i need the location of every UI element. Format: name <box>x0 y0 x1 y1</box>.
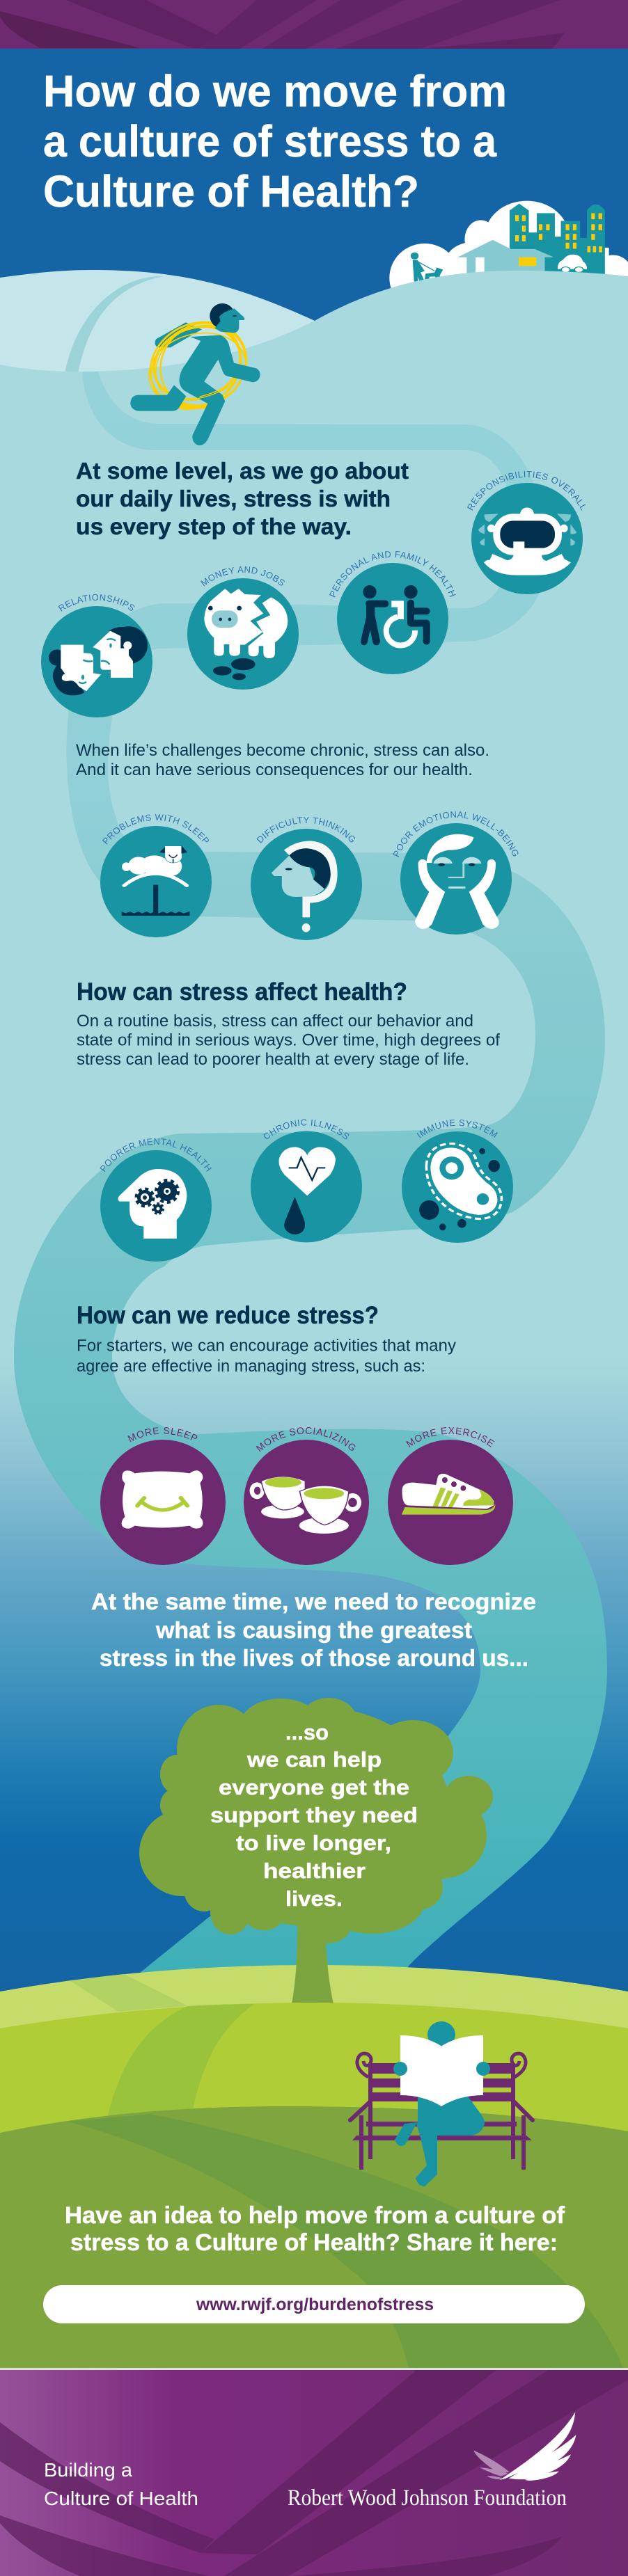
label: POOR EMOTIONAL WELL-BEING <box>393 811 518 857</box>
runner body <box>179 335 260 445</box>
open book <box>400 2035 483 2106</box>
broken piggy bank <box>204 589 288 680</box>
icon: car <box>558 255 587 272</box>
cell and particles <box>419 1143 501 1230</box>
hill: light green <box>0 1965 628 2039</box>
label: RELATIONSHIPS <box>58 594 135 612</box>
icon: money and jobs <box>187 566 299 690</box>
icon: wing logo <box>473 2412 576 2481</box>
body copy <box>77 1012 500 1069</box>
url pill <box>43 2285 585 2323</box>
text: in the tree: we can help <box>246 1747 382 1772</box>
label: DIFFICULTY THINKING <box>256 817 355 843</box>
footer tagline: Culture of Health <box>44 2488 198 2509</box>
text: in the tree <box>210 1720 418 1911</box>
bench with reading person <box>350 2021 533 2186</box>
hill: main <box>0 271 628 397</box>
person legs <box>395 2094 485 2186</box>
icon: more sleep <box>100 1427 226 1565</box>
label: RESPONSIBILITIES OVERALL <box>467 471 586 511</box>
tree <box>139 1698 493 2004</box>
overwhelmed figure <box>478 507 576 575</box>
url pill: www.rwjf.org/burdenofstress <box>196 2295 434 2314</box>
text: in the tree: support they need <box>210 1803 418 1827</box>
sheep jumping a fence <box>122 845 189 916</box>
footer <box>0 2368 628 2576</box>
worried face in hands <box>415 834 499 929</box>
text: when challenges become chronic <box>76 741 489 779</box>
bench <box>350 2053 533 2170</box>
hill: back left <box>0 270 315 390</box>
icon: person walking dog <box>411 253 443 284</box>
lower sky gradient <box>0 390 628 2004</box>
caregiver and wheelchair <box>361 585 427 646</box>
smiling pillow <box>122 1470 203 1529</box>
runner back foot <box>130 385 186 411</box>
title: a culture of stress to a <box>43 116 496 166</box>
text: stress is with us <box>76 458 409 539</box>
hill: dark green <box>0 2106 628 2368</box>
label: PROBLEMS WITH SLEEP <box>102 814 209 845</box>
icon: white cloud behind town <box>389 201 628 312</box>
icon: city buildings <box>510 204 605 278</box>
icon: runner tangled in yellow scribble <box>130 303 260 445</box>
text: stress is with us: At some level, as we go about <box>76 458 409 484</box>
hands <box>393 2062 490 2076</box>
label: CHRONIC ILLNESS <box>264 1119 350 1139</box>
body copy: agree are effective in managing stress, such as: <box>77 1357 425 1376</box>
gears <box>136 1180 178 1214</box>
text: in the tree: healthier <box>263 1859 366 1883</box>
body copy: stress can lead to poorer health at every stage of life. <box>77 1050 469 1069</box>
icon: personal and family health <box>329 551 456 674</box>
heading: How can we reduce stress? <box>77 1302 379 1329</box>
text: at the same time: what is causing the greatest <box>155 1617 472 1643</box>
sneaker <box>402 1474 495 1515</box>
town on the horizon <box>389 201 628 312</box>
head in question mark <box>272 841 338 932</box>
text: stress is with us: us every step of the way. <box>76 514 352 539</box>
title: Culture of Health? <box>43 166 419 216</box>
runner head <box>210 303 235 328</box>
text: in the tree: to live longer, <box>236 1831 391 1855</box>
footer tagline: Building a <box>44 2459 132 2481</box>
two coffee cups <box>250 1477 361 1534</box>
two faces <box>49 626 148 695</box>
trunk <box>292 1921 333 2004</box>
call to action text: Have an idea to help move from a culture of <box>65 2202 565 2229</box>
body copy: state of mind in serious ways. Over time, high degrees of <box>77 1031 500 1049</box>
path on dark green hill <box>68 2114 623 2368</box>
person head <box>427 2021 455 2048</box>
title: How do we move from <box>43 66 507 116</box>
text: in the tree: ...so <box>285 1720 329 1744</box>
text: when challenges become chronic: When life’s challenges become chronic, stress can also. <box>76 741 489 760</box>
heart and drop <box>279 1147 336 1234</box>
icon: difficulty thinking <box>251 817 362 940</box>
body copy: On a routine basis, stress can affect our behavior and <box>77 1012 473 1031</box>
text: in the tree: lives. <box>285 1886 343 1911</box>
path on light green hill <box>70 1974 188 2012</box>
body copy: For starters, we can encourage activities that many <box>77 1336 456 1355</box>
label: MORE SLEEP <box>127 1427 198 1442</box>
label: IMMUNE SYSTEM <box>416 1120 498 1138</box>
footer tagline <box>44 2459 198 2509</box>
text: at the same time: At the same time, we need to recognize <box>91 1589 536 1614</box>
icon: poorer mental health <box>100 1138 212 1262</box>
sky background <box>0 49 628 397</box>
text: in the tree: everyone get the <box>219 1775 409 1799</box>
label: MONEY AND JOBS <box>201 566 285 587</box>
icon: more socializing <box>244 1427 369 1565</box>
scribble over thigh <box>195 383 237 399</box>
text: at the same time <box>91 1589 536 1671</box>
path on back hill <box>65 276 164 373</box>
label: PERSONAL AND FAMILY HEALTH <box>329 551 456 597</box>
label: MORE SOCIALIZING <box>256 1427 355 1452</box>
hill: medium green <box>0 2003 628 2143</box>
text: how can stress affect health <box>77 978 500 1069</box>
heading: How can stress affect health? <box>77 978 407 1005</box>
text: stress is with us: our daily lives, stress is with <box>76 486 391 511</box>
icon: relationships <box>41 594 152 717</box>
label: MORE EXERCISE <box>406 1427 494 1447</box>
winding road <box>14 372 607 1990</box>
canopy <box>139 1698 493 1943</box>
icon: poor emotional well-being <box>393 811 518 935</box>
title <box>43 66 507 216</box>
footer ribbon pattern <box>0 2370 628 2576</box>
icon: immune system <box>402 1120 513 1243</box>
icon: chronic illness <box>251 1119 362 1243</box>
body copy <box>77 1336 456 1376</box>
label: POORER MENTAL HEALTH <box>100 1138 212 1172</box>
foundation name: Robert Wood Johnson Foundation <box>288 2486 567 2511</box>
header band <box>0 0 628 49</box>
icon: house <box>457 240 554 278</box>
text: how can we reduce stress <box>77 1302 456 1376</box>
icon: more exercise <box>388 1427 513 1565</box>
text: when challenges become chronic: And it can have serious consequences for our health. <box>76 761 473 779</box>
back arm <box>155 322 202 347</box>
icon: responsibilities overall <box>467 471 586 594</box>
call to action text <box>65 2202 565 2256</box>
icon: problems with sleep <box>100 814 212 937</box>
head silhouette <box>118 1169 187 1239</box>
call to action text: stress to a Culture of Health? Share it here: <box>70 2229 558 2256</box>
path on medium green hill <box>108 2004 254 2115</box>
stress scribble <box>134 305 260 427</box>
text: at the same time: stress in the lives of those around us... <box>100 1645 528 1671</box>
